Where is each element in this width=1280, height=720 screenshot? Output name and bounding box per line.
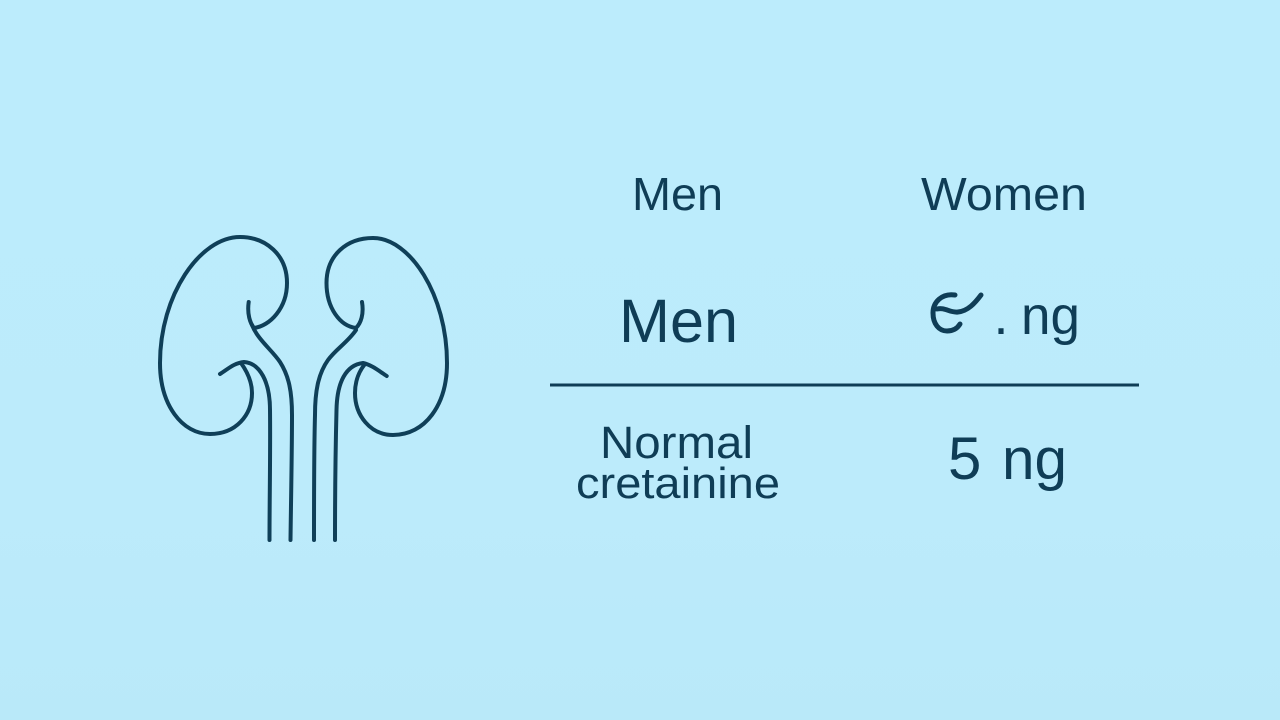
left inner ureter [252,325,292,540]
table value: 5 ng: ng [1002,427,1067,492]
left kidney hook and outer ureter [220,362,270,540]
right kidney hook and outer ureter [335,363,387,540]
text: dot and ng unit: ng [1021,286,1080,346]
icon: garbled numeral glyph [933,295,981,331]
table value: Men: Men [619,287,738,355]
table value: garbled glyph and ng [933,286,1080,346]
row label: Normal cretainine: Normal [600,417,753,468]
text: dot and ng unit: . [994,286,1009,346]
row label: Normal cretainine: cretainine [576,459,780,508]
table divider line [550,384,1139,386]
text: dot and ng unit [994,286,1080,346]
table value: 5 ng [948,425,1067,492]
column heading: Men: Men [632,168,723,220]
left kidney outline [160,237,287,434]
row label: Normal cretainine [576,417,780,508]
table value: 5 ng: 5 [948,425,981,492]
right inner ureter [314,330,356,540]
column heading: Women: Women [921,168,1087,220]
icon: kidneys with ureters [160,237,447,540]
right kidney outline [326,238,447,435]
